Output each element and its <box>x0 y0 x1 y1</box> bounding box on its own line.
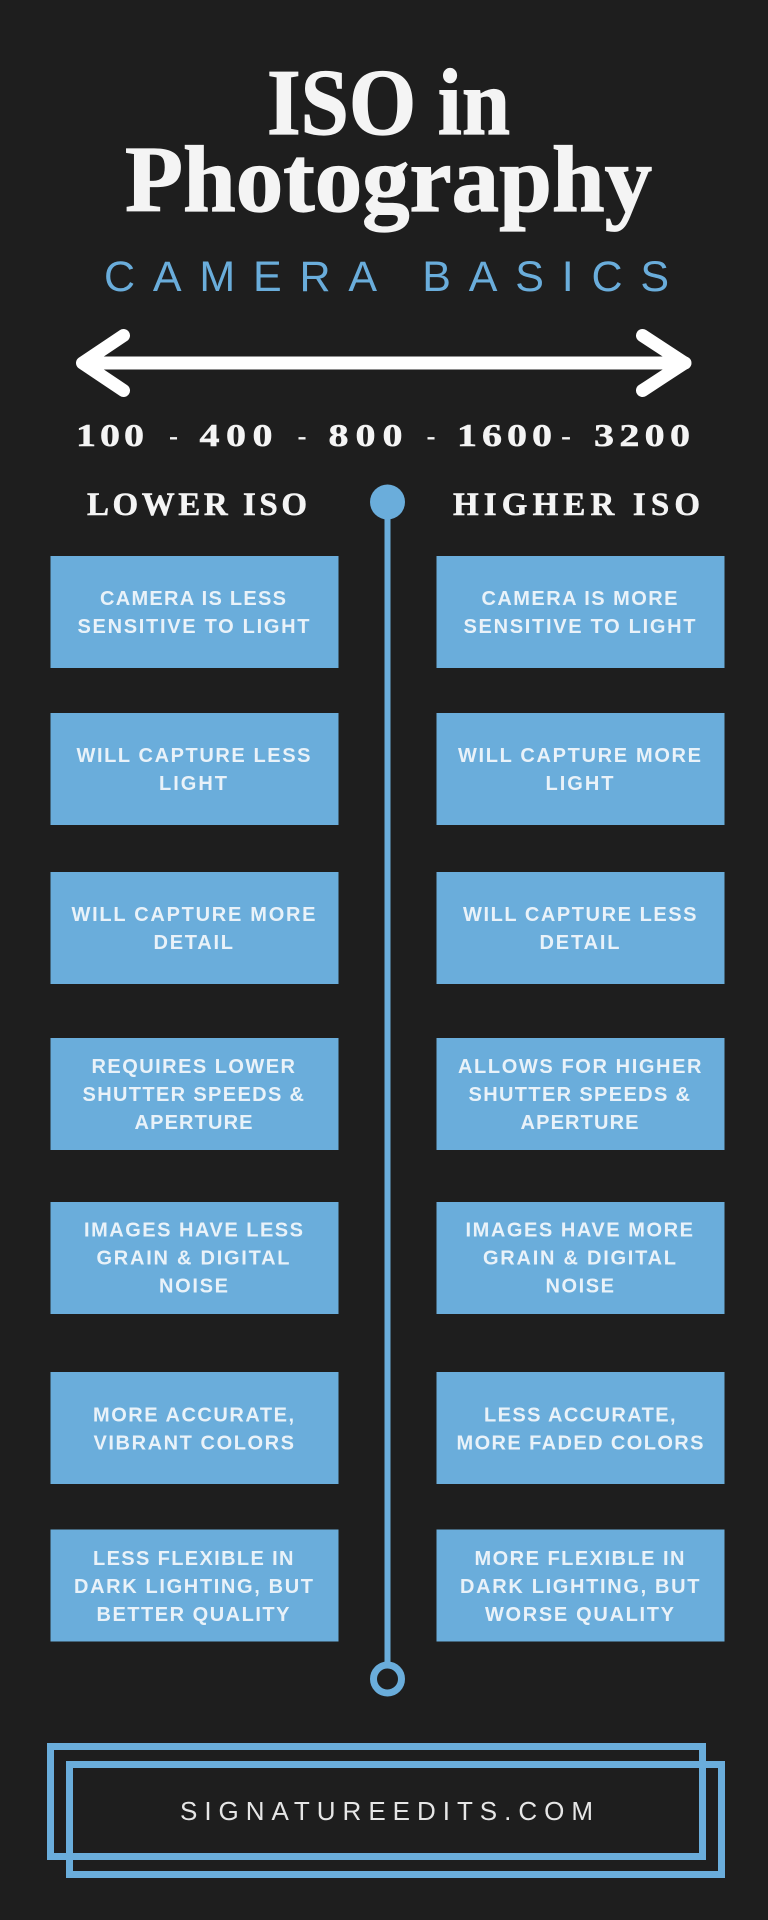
card: camera is more sensitive <box>436 556 724 668</box>
card: requires lower shutter speeds: REQUIRES LOWER <box>92 1056 296 1078</box>
card: less accurate faded colors: MORE FADED COLORS <box>456 1432 704 1454</box>
card: camera is less sensitive <box>50 556 338 668</box>
timeline: centre line with end dots <box>370 484 405 1693</box>
subtitle: CAMERA BASICS <box>104 253 669 301</box>
card: will capture less detail: DETAIL <box>540 932 620 954</box>
card: allows for higher shutter speeds: SHUTTER SPEEDS & <box>468 1084 690 1106</box>
card: images have more grain: GRAIN & DIGITAL <box>483 1248 676 1270</box>
card: will capture more detail: WILL CAPTURE MORE <box>72 904 316 926</box>
card: will capture less detail <box>436 872 724 984</box>
icon: double-headed arrow <box>82 336 685 390</box>
card: camera is more sensitive: CAMERA IS MORE <box>482 588 678 610</box>
ISO scale numbers: - <box>169 417 178 453</box>
card: more flexible in dark lighting <box>436 1530 724 1642</box>
card: will capture less light <box>50 713 338 825</box>
ISO scale numbers: 800 <box>328 418 403 453</box>
ISO scale numbers: 100 <box>76 418 144 453</box>
card: will capture less light: WILL CAPTURE LESS <box>76 745 310 767</box>
card: images have less grain <box>50 1202 338 1314</box>
card: images have less grain: GRAIN & DIGITAL <box>96 1248 290 1270</box>
heading: lower ISO: LOWER ISO <box>87 487 307 523</box>
card: more accurate vibrant colors: VIBRANT COLORS <box>94 1432 294 1454</box>
card: less flexible in dark lighting <box>50 1530 338 1642</box>
card: camera is more sensitive: SENSITIVE TO LIGHT <box>464 616 696 638</box>
ISO scale numbers: - <box>561 417 571 453</box>
ISO scale numbers: 1600 <box>457 418 552 453</box>
footer: overlapping frames with website <box>50 1746 722 1874</box>
card: will capture less light: LIGHT <box>159 773 227 795</box>
card: will capture more detail <box>50 872 338 984</box>
card: requires lower shutter speeds: APERTURE <box>134 1112 252 1134</box>
ISO scale numbers: - <box>426 417 436 453</box>
title <box>125 51 652 232</box>
ISO scale numbers: 3200 <box>594 418 690 453</box>
card: will capture more light: LIGHT <box>546 773 614 795</box>
card: will capture more light <box>436 713 724 825</box>
card: less accurate faded colors <box>436 1372 724 1484</box>
card: less flexible in dark lighting: BETTER QUALITY <box>96 1604 290 1626</box>
title: ISO in <box>267 51 510 155</box>
ISO scale numbers: - <box>298 417 306 453</box>
card: allows for higher shutter speeds: APERTURE <box>520 1112 638 1134</box>
card: more accurate vibrant colors: MORE ACCURATE, <box>93 1404 294 1426</box>
card: images have less grain: NOISE <box>159 1276 228 1298</box>
card: less accurate faded colors: LESS ACCURATE, <box>484 1404 676 1426</box>
card: more accurate vibrant colors <box>50 1372 338 1484</box>
footer: overlapping frames with website: SIGNATUREEDITS.COM <box>180 1796 593 1826</box>
card: requires lower shutter speeds: SHUTTER SPEEDS & <box>82 1084 304 1106</box>
card: more flexible in dark lighting: MORE FLEXIBLE IN <box>474 1548 684 1570</box>
card: more flexible in dark lighting: DARK LIGHTING, BUT <box>460 1576 700 1598</box>
title: Photography <box>125 128 652 232</box>
card: images have more grain <box>436 1202 724 1314</box>
card: less flexible in dark lighting: LESS FLEXIBLE IN <box>93 1548 294 1570</box>
ISO scale numbers: 400 <box>200 418 273 453</box>
card: less flexible in dark lighting: DARK LIGHTING, BUT <box>74 1576 313 1598</box>
card: camera is less sensitive: SENSITIVE TO LIGHT <box>78 616 310 638</box>
card: images have less grain: IMAGES HAVE LESS <box>84 1220 303 1242</box>
heading: higher ISO: HIGHER ISO <box>453 487 700 523</box>
card: requires lower shutter speeds <box>50 1038 338 1150</box>
card: more flexible in dark lighting: WORSE QUALITY <box>485 1604 675 1626</box>
ISO scale numbers <box>76 417 690 453</box>
card: images have more grain: NOISE <box>546 1276 614 1298</box>
card: images have more grain: IMAGES HAVE MORE <box>466 1220 693 1242</box>
card: allows for higher shutter speeds: ALLOWS FOR HIGHER <box>458 1056 702 1078</box>
card: will capture more detail: DETAIL <box>154 932 233 954</box>
card: will capture more light: WILL CAPTURE MORE <box>458 745 701 767</box>
card: allows for higher shutter speeds <box>436 1038 724 1150</box>
card: camera is less sensitive: CAMERA IS LESS <box>100 588 286 610</box>
card: will capture less detail: WILL CAPTURE LESS <box>463 904 696 926</box>
